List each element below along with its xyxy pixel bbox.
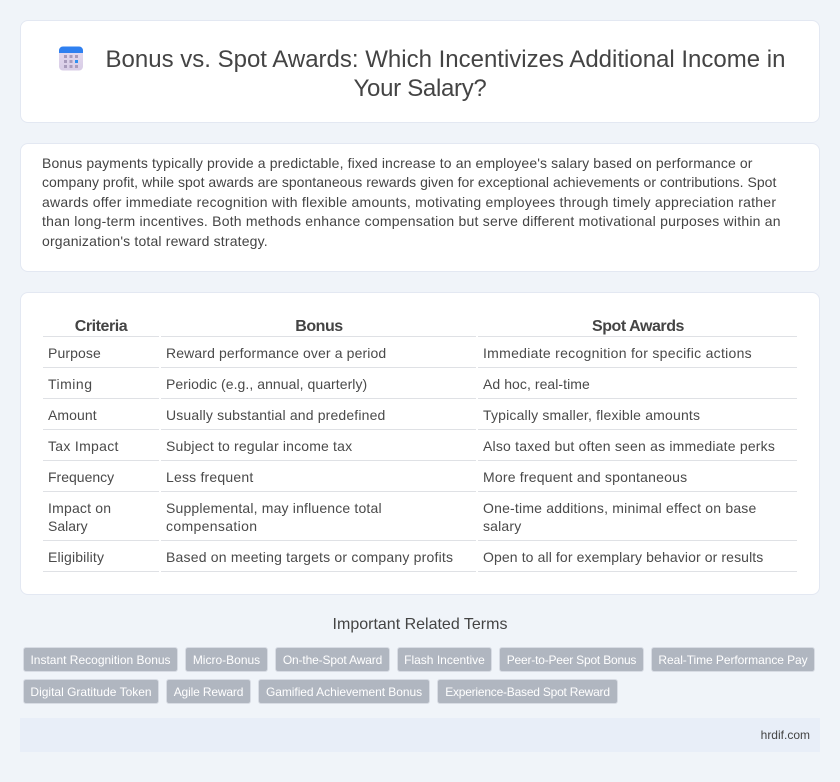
description text: organization's total reward strategy. [42, 233, 268, 249]
comparison table: Also taxed but often seen as immediate perks [483, 438, 775, 454]
comparison table: Amount [48, 407, 97, 423]
comparison table: Eligibility [48, 549, 104, 565]
description text: than long-term incentives. Both methods enhance compensation but serve different motivational purposes within an [42, 213, 781, 229]
related term tags: Micro-Bonus [193, 653, 260, 667]
comparison table: More frequent and spontaneous [483, 469, 687, 485]
comparison table: Timing [48, 376, 92, 392]
comparison table: Bonus [295, 318, 343, 334]
related terms heading: Important Related Terms [333, 616, 507, 633]
related term tags: Gamified Achievement Bonus [266, 685, 422, 699]
title: Your Salary? [354, 75, 486, 102]
related term tags: Instant Recognition Bonus [30, 653, 171, 667]
comparison table: Purpose [48, 345, 101, 361]
comparison table: One-time additions, minimal effect on base [483, 500, 756, 516]
comparison table: Frequency [48, 469, 114, 485]
description card [20, 143, 820, 272]
comparison table: salary [483, 518, 521, 534]
comparison table: Immediate recognition for specific actions [483, 345, 752, 361]
footer source text: hrdif.com [761, 728, 810, 742]
related term tags: Experience-Based Spot Reward [445, 685, 610, 699]
comparison table: Subject to regular income tax [166, 438, 352, 454]
title: Bonus vs. Spot Awards: Which Incentivizes Additional Income in [106, 46, 785, 73]
header card [20, 20, 820, 123]
description text: Bonus payments typically provide a predictable, fixed increase to an employee's salary based on performance or [42, 155, 753, 171]
related term tags: Peer-to-Peer Spot Bonus [507, 653, 636, 667]
comparison table: Usually substantial and predefined [166, 407, 385, 423]
table card [20, 292, 820, 595]
comparison table: Periodic (e.g., annual, quarterly) [166, 376, 367, 392]
related term tags: Digital Gratitude Token [30, 685, 152, 699]
title [106, 46, 785, 102]
footer bar [20, 718, 820, 752]
related term tags: On-the-Spot Award [283, 653, 382, 667]
comparison table: Typically smaller, flexible amounts [483, 407, 700, 423]
comparison table: Less frequent [166, 469, 253, 485]
comparison table [43, 318, 797, 572]
comparison table: Based on meeting targets or company profits [166, 549, 453, 565]
related term tags: Agile Reward [174, 685, 243, 699]
comparison table: Criteria [75, 318, 127, 334]
comparison table: Ad hoc, real-time [483, 376, 590, 392]
comparison table: Supplemental, may influence total [166, 500, 382, 516]
comparison table: compensation [166, 518, 257, 534]
comparison table: Spot Awards [592, 318, 684, 334]
icon: calendar [59, 46, 83, 70]
comparison table: Open to all for exemplary behavior or results [483, 549, 763, 565]
related term tags: Flash Incentive [404, 653, 485, 667]
description text: company profit, while spot awards are spontaneous rewards given for exceptional achievements or contributions. Spot [42, 174, 776, 190]
comparison table: Reward performance over a period [166, 345, 386, 361]
related term tags [23, 647, 815, 704]
related term tags: Real-Time Performance Pay [658, 653, 808, 667]
description text: awards offer immediate recognition with flexible amounts, motivating employees through timely appreciation rather [42, 194, 776, 210]
description text [42, 155, 781, 249]
comparison table: Impact on [48, 500, 111, 516]
comparison table: Tax Impact [48, 438, 119, 454]
comparison table: Salary [48, 518, 88, 534]
